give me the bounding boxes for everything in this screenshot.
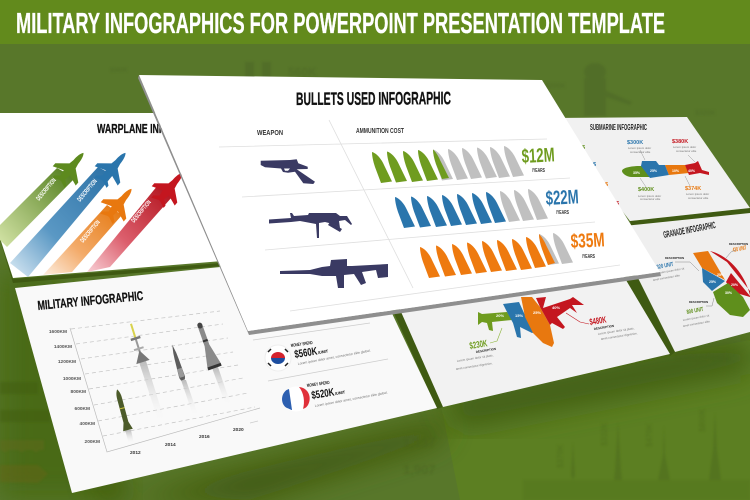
submarine callouts: consectetur elite [630, 150, 651, 154]
chart: missile ranges [49, 311, 260, 456]
rocket: green missile [112, 388, 133, 431]
callout: France spend: MONEY SPEND [306, 380, 330, 388]
axis labels: 1400KM [54, 344, 72, 350]
ghost stats: $200K [545, 83, 566, 90]
callout: Korea spend: /UNIT [317, 348, 329, 355]
callout: red value: $480K [589, 314, 607, 327]
plane segment: blue [503, 302, 535, 338]
ribbon labels: DESCRIPTION [76, 178, 99, 203]
plane segment: red [536, 297, 584, 329]
axis labels: 600KM [75, 406, 90, 412]
grenade callouts [652, 242, 748, 328]
grenade callouts: amet consectetur elite [682, 319, 711, 328]
callout: Korea spend: Lorem ipsum dolor amet, consectetur elite global. [297, 349, 371, 366]
ghost rockets: $470K [645, 423, 654, 447]
row 1 value: /YEARS [532, 168, 545, 174]
icon: assault rifle [280, 259, 388, 288]
submarine callouts: consectetur elite [676, 149, 697, 153]
grenade callouts: DESCRIPTION [729, 242, 748, 246]
ghost stats: $500K [105, 111, 129, 120]
axis labels: 1200KM [58, 359, 76, 365]
submarine callouts: consectetur elite [688, 196, 709, 200]
submarine callouts: Lorem ipsum dolor [686, 192, 709, 196]
submarine callouts: Lorem ipsum dolor [638, 194, 661, 198]
ghost figures: 1,907 [403, 462, 436, 477]
ghost figures: 1,137 [403, 435, 436, 450]
airplane diagram: 40% [552, 305, 560, 310]
year labels: 2016 [199, 434, 210, 440]
submarine heading: SUBMARINE INFOGRAPHIC [590, 123, 647, 132]
grenade diagram: 30% [725, 291, 733, 295]
submarine diagram [622, 161, 709, 178]
ghost vehicles [0, 382, 50, 422]
ghost rockets [523, 408, 750, 500]
callout: green value [456, 328, 502, 371]
submarine callouts: $ [605, 182, 608, 188]
callout: Korea spend: $560K [294, 346, 318, 361]
submarine callouts [582, 139, 709, 207]
submarine callouts: Lorem ipsum dolor [673, 145, 696, 149]
row 2 value [545, 186, 579, 216]
grenade callouts: DESCRIPTION [689, 300, 708, 304]
grenade callouts: Lorem ipsum dolor sit [682, 313, 710, 322]
ribbon: red [87, 185, 172, 272]
icon: submachine gun [269, 213, 352, 238]
ribbon labels: DESCRIPTION [35, 177, 58, 202]
callout: red value: DESCRIPTION [594, 324, 614, 331]
panel: military infographic [15, 265, 437, 493]
grenade diagram: 25% [709, 280, 717, 284]
icon: red plane [146, 163, 194, 212]
icon: Korea flag [265, 345, 291, 371]
submarine diagram: 25% [650, 169, 658, 173]
year labels: 2020 [233, 427, 244, 433]
ghost stats: $560K [110, 68, 128, 74]
grenade diagram [693, 251, 750, 317]
row 1 bullets [372, 146, 524, 183]
main heading: BULLETS USED INFOGRAPHIC [296, 88, 451, 109]
submarine callouts: Lorem ipsum dolor [628, 146, 651, 150]
submarine callouts: $400K [638, 187, 654, 193]
submarine callouts: $ [616, 201, 619, 207]
ghost figures [403, 352, 729, 477]
callout: red value: amet consectetur dignissim. [601, 331, 638, 341]
row 1 value: $12M [521, 144, 555, 168]
axis labels: 1000KM [63, 376, 81, 382]
icon: orange plane [95, 179, 143, 228]
row 3 value: $35M [570, 229, 605, 253]
ribbon labels: DESCRIPTION [79, 219, 102, 244]
panel: submarine infographic [550, 117, 750, 228]
ghost stats: 560K [288, 65, 317, 79]
submarine callouts: $380K [672, 139, 688, 145]
callout: France spend: $520K [311, 387, 335, 402]
column header: ammunition cost: AMMUNITION COST [356, 128, 405, 135]
year labels: 2014 [165, 442, 176, 448]
axis labels: 1600KM [49, 329, 67, 335]
military heading: MILITARY INFOGRAPHIC [37, 288, 144, 313]
panel: warplane infographic [0, 113, 260, 283]
rocket: grey missile [169, 344, 186, 381]
plane segment: orange [521, 297, 554, 347]
ghost stats: $320K [695, 110, 716, 117]
callout: green value: $230K [469, 338, 488, 352]
callout: green value: amet consectetur dignissim. [456, 361, 493, 371]
airplane diagram [478, 297, 584, 347]
callout: red value: Lorem ipsum dolor sit plato, [598, 326, 635, 336]
ghost figures: OGRAPHIC [675, 352, 729, 363]
grenade callouts: amet consectetur elite [652, 273, 681, 282]
airplane diagram: 25% [533, 310, 541, 315]
row 3 bullets [420, 233, 573, 278]
row 3 value: /YEARS [582, 254, 595, 260]
callout: Korea spend [253, 323, 371, 371]
ghost rockets: $332K [600, 422, 609, 446]
panel: bullets used infographic [138, 75, 661, 335]
callout: France spend [250, 359, 388, 423]
grenade callouts: DESCRIPTION [665, 256, 684, 260]
year labels: 2012 [130, 450, 141, 456]
rocket trails [125, 361, 232, 444]
ribbon: blue [10, 167, 113, 277]
callout: red value [566, 313, 638, 341]
callout: Korea spend: MONEY SPEND [290, 340, 313, 348]
row 2 value: /YEARS [556, 210, 569, 216]
panel: airplane share infographic [388, 270, 675, 409]
ghost soldiers [245, 62, 632, 116]
row 3 value [570, 229, 605, 260]
ribbon labels: DESCRIPTION [130, 199, 153, 224]
submarine callouts: $ [582, 145, 585, 151]
column header: weapon: WEAPON [257, 130, 283, 137]
row 2 value: $22M [545, 186, 579, 210]
axis labels: 800KM [71, 389, 86, 395]
airplane diagram: 20% [496, 313, 504, 318]
ribbon labels [35, 177, 153, 244]
ghost stats [105, 65, 716, 120]
callout: green value: DESCRIPTION [476, 347, 496, 354]
axis labels: 400KM [80, 421, 95, 427]
icon: blue plane [89, 143, 137, 192]
axis labels: 200KM [85, 439, 100, 445]
rocket: yellow-tipped missile [124, 322, 150, 364]
submarine diagram: 10% [672, 169, 680, 173]
rocket: carrier rocket [192, 320, 222, 370]
grenade callouts: 320 UNIT [656, 262, 674, 271]
grenade callouts: 800 UNIT [686, 307, 704, 316]
year labels [130, 427, 244, 456]
callout: France spend: Lorem ipsum dolor amet, consectetur elite global. [314, 391, 388, 408]
airplane diagram: 15% [515, 313, 523, 318]
submarine callouts: $ [593, 162, 596, 168]
submarine diagram: 40% [688, 169, 696, 173]
ribbon: orange [43, 205, 122, 275]
callout: France spend: /UNIT [334, 389, 346, 396]
ghost rockets: $800K [698, 408, 707, 432]
icon: green plane [47, 143, 95, 192]
submarine callouts: consectetur elite [640, 197, 661, 201]
submarine diagram: 35% [633, 171, 641, 175]
row 1 value [521, 144, 555, 174]
grenade diagram: 20% [731, 283, 739, 287]
submarine callouts: $300K [627, 140, 643, 146]
ribbon: green [0, 168, 75, 247]
warplane heading: WARPLANE INFOGRAPHIC [97, 121, 212, 136]
plane segment: green tail [478, 312, 512, 331]
panel: grenade infographic [595, 213, 750, 352]
grenade callouts: Lorem ipsum dolor sit [657, 266, 685, 275]
callout: green value: Lorem ipsum dolor sit plato, [457, 353, 494, 363]
row 2 bullets [395, 189, 548, 228]
submarine callouts: $374K [685, 186, 701, 192]
grenade diagram: 25% [717, 273, 725, 277]
icon: pistol [261, 159, 315, 184]
ghost rockets: $370K [556, 444, 565, 468]
icon: France flag [282, 386, 310, 412]
axis labels [49, 329, 100, 445]
